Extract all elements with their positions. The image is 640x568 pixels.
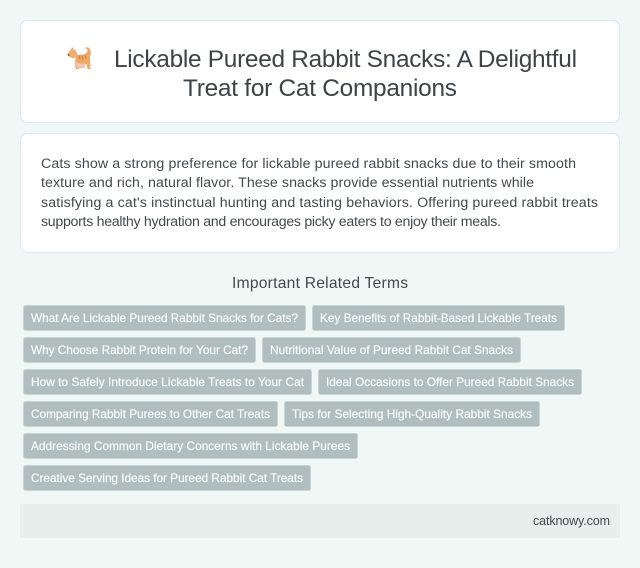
panel: title card xyxy=(20,20,620,122)
footer: catknowy.com xyxy=(533,514,610,528)
text block: summary: satisfying a cat's instinctual hunting and tasting behaviors. Offering pureed rabbit treats xyxy=(41,195,598,211)
tag 2 xyxy=(312,306,564,330)
tag 10 xyxy=(24,466,310,490)
title: Lickable Pureed Rabbit Snacks: A Delightful xyxy=(114,46,577,73)
tag 8: Tips for Selecting High-Quality Rabbit Snacks xyxy=(292,407,532,421)
tag 1 xyxy=(24,306,306,330)
tag 8 xyxy=(284,402,540,426)
tag 1: What Are Lickable Pureed Rabbit Snacks for Cats? xyxy=(31,311,298,325)
tag 6 xyxy=(318,370,582,394)
title xyxy=(114,46,577,102)
tag 4 xyxy=(262,338,520,362)
tag 2: Key Benefits of Rabbit-Based Lickable Treats xyxy=(320,311,557,325)
heading: related terms: Important Related Terms xyxy=(232,275,408,292)
tag 4: Nutritional Value of Pureed Rabbit Cat Snacks xyxy=(270,343,513,357)
tag 3: Why Choose Rabbit Protein for Your Cat? xyxy=(31,343,248,357)
text block: summary xyxy=(41,156,598,230)
title: Treat for Cat Companions xyxy=(183,75,457,102)
panel: summary card xyxy=(20,134,620,252)
text block: summary: Cats show a strong preference for lickable pureed rabbit snacks due to their smooth xyxy=(41,156,576,172)
text block: summary: supports healthy hydration and encourages picky eaters to enjoy their meals. xyxy=(41,214,501,230)
tag 3 xyxy=(24,338,256,362)
tag 7 xyxy=(24,402,278,426)
tag 7: Comparing Rabbit Purees to Other Cat Treats xyxy=(31,407,270,421)
icon: cat xyxy=(68,47,91,69)
tag 5 xyxy=(24,370,312,394)
tag 5: How to Safely Introduce Lickable Treats to Your Cat xyxy=(31,375,305,389)
tag 6: Ideal Occasions to Offer Pureed Rabbit Snacks xyxy=(326,375,574,389)
tag 9 xyxy=(24,434,358,458)
text block: summary: texture and rich, natural flavor. These snacks provide essential nutrients while xyxy=(41,175,534,191)
tag 9: Addressing Common Dietary Concerns with Lickable Purees xyxy=(31,439,350,453)
panel: related term tags xyxy=(24,306,582,490)
tag 10: Creative Serving Ideas for Pureed Rabbit Cat Treats xyxy=(31,471,303,485)
footer xyxy=(20,504,620,538)
